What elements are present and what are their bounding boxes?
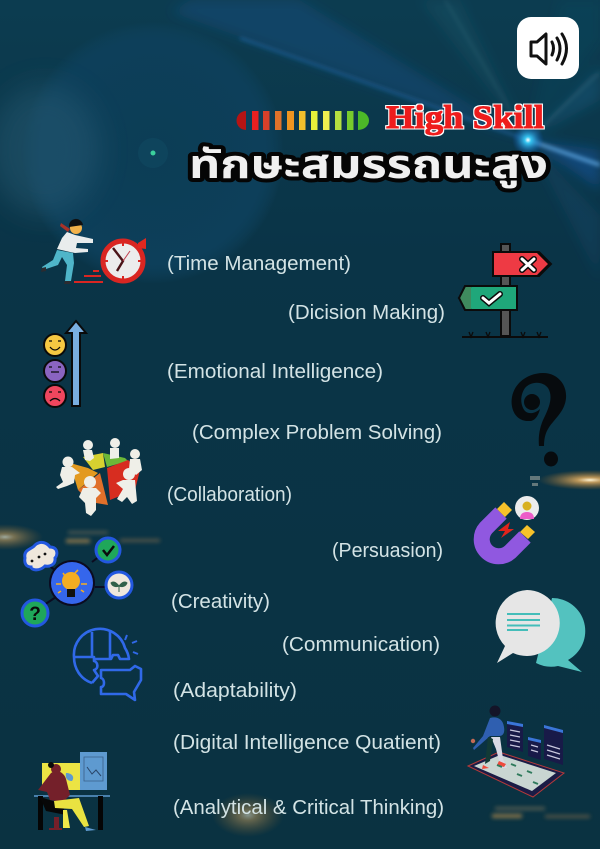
icon: speaker button	[517, 17, 579, 79]
title: Thai heading: ทักษะสมรรถนะสูง	[189, 143, 548, 189]
text: Collaboration: (Collaboration)	[167, 483, 292, 506]
icon: creativity mind map: ?	[29, 604, 41, 625]
heading: High Skill: High Skill	[386, 100, 544, 136]
icon: signpost	[459, 244, 551, 337]
icon: person walking on tablet with data panels	[468, 706, 564, 797]
text: Emotional Intelligence: (Emotional Intelligence)	[167, 360, 383, 383]
icon: skill level meter	[236, 111, 369, 130]
warm lens flares	[538, 470, 600, 490]
icon: running man with clock	[41, 219, 146, 284]
icon: emotions with up arrow	[44, 321, 86, 407]
text: Persuasion: (Persuasion)	[332, 539, 443, 562]
text: Digital Intelligence Quatient: (Digital Intelligence Quatient)	[173, 731, 441, 754]
icon: speech bubbles	[496, 590, 585, 672]
text: Adaptability: (Adaptability)	[173, 679, 297, 702]
text: Analytical and Critical Thinking: (Analytical & Critical Thinking)	[173, 796, 444, 819]
icon: question mark	[512, 373, 566, 486]
text: Communication: (Communication)	[282, 633, 440, 656]
icon: team around pie chart	[56, 438, 142, 516]
icon: creativity mind map	[22, 538, 132, 626]
icon: magnet attracting person	[482, 496, 539, 556]
text: Dicision Making: (Dicision Making)	[288, 301, 445, 324]
text: Creativity: (Creativity)	[171, 590, 270, 613]
text: Time Management: (Time Management)	[167, 252, 351, 275]
text: Complex Problem Solving: (Complex Problem Solving)	[192, 421, 442, 444]
icon: analyst at desk	[34, 752, 110, 831]
icon: globe puzzle with speech bubble	[74, 629, 141, 700]
